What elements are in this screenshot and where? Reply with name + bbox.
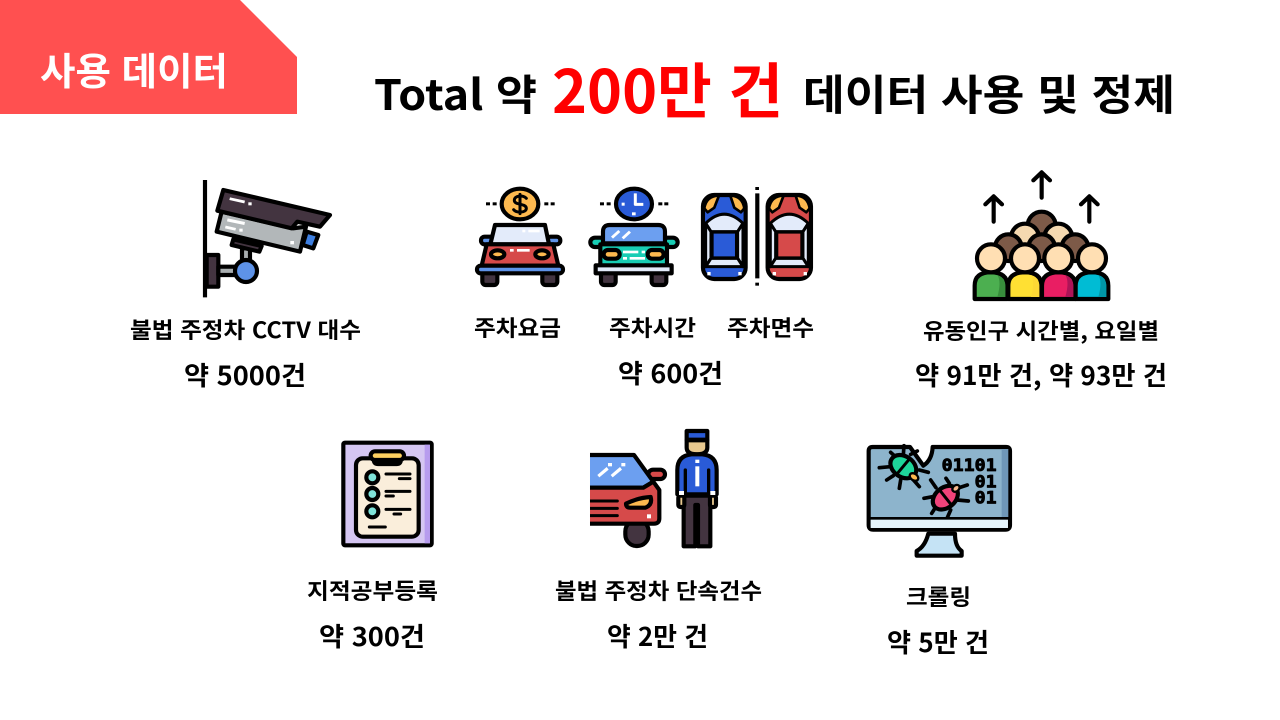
icon: crowd with arrows — [975, 172, 1108, 299]
icon: monitor with bugs: 01 — [975, 489, 997, 508]
title: Total 약 — [374, 62, 537, 123]
icon: clipboard — [343, 443, 432, 545]
label: 불법 주정차 단속건수: 불법 주정차 단속건수 — [555, 574, 762, 606]
label: 크롤링: 크롤링 — [906, 580, 971, 612]
title — [374, 44, 1175, 131]
icon: parking spaces top view — [703, 187, 811, 286]
value: 약 2만 건: 약 2만 건 — [607, 617, 708, 654]
icon: parking fee car — [477, 189, 563, 285]
label: 주차면수: 주차면수 — [727, 311, 814, 343]
label: 주차시간: 주차시간 — [609, 311, 696, 343]
section tag: 사용 데이터: 사용 데이터 — [40, 41, 228, 96]
title: 200만 건 — [552, 44, 783, 131]
value: 약 91만 건, 약 93만 건: 약 91만 건, 약 93만 건 — [915, 356, 1167, 393]
icon: monitor with bugs — [869, 446, 1010, 556]
icon: monitor with bugs: 01 — [975, 472, 997, 491]
value: 약 600건: 약 600건 — [618, 354, 723, 391]
icon: car and enforcement officer — [580, 431, 717, 546]
value: 약 5만 건: 약 5만 건 — [887, 623, 989, 660]
value: 약 300건: 약 300건 — [319, 617, 425, 654]
label: 불법 주정차 CCTV 대수: 불법 주정차 CCTV 대수 — [130, 313, 361, 345]
icon: parking time car — [590, 189, 678, 285]
value: 약 5000건: 약 5000건 — [184, 356, 306, 393]
icon: monitor with bugs: 01101 — [942, 456, 997, 475]
icon: CCTV camera — [205, 180, 330, 297]
section tag: 사용 데이터 — [0, 0, 297, 114]
label: 지적공부등록: 지적공부등록 — [307, 574, 438, 606]
label: 유동인구 시간별, 요일별: 유동인구 시간별, 요일별 — [923, 314, 1159, 346]
label: 주차요금: 주차요금 — [474, 311, 561, 343]
title: 데이터 사용 및 정제 — [803, 62, 1175, 123]
